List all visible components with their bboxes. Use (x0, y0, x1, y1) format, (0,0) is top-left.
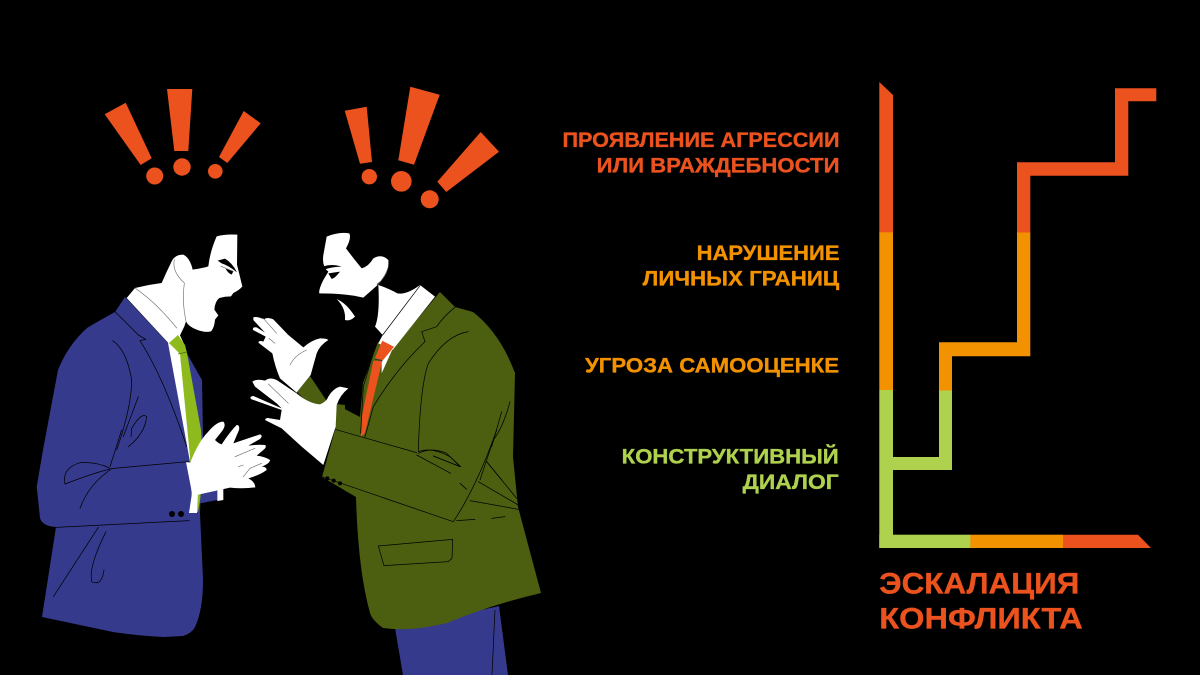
icon: exclamation marks above left man (105, 89, 261, 184)
label: threat to self-esteem: УГРОЗА САМООЦЕНКЕ (585, 354, 839, 377)
right man head and collar (319, 233, 435, 350)
label: aggression or hostility: ПРОЯВЛЕНИЕ АГРЕССИИ (562, 129, 840, 152)
label: constructive dialogue: КОНСТРУКТИВНЫЙ (622, 444, 839, 468)
left man jacket upper lines (113, 312, 187, 450)
orange step (939, 232, 1030, 390)
right man lower jacket lines (322, 430, 518, 566)
label: constructive dialogue: ДИАЛОГ (743, 471, 839, 494)
red step (1017, 88, 1156, 232)
right man lower hand (250, 378, 348, 465)
right man upper hand (253, 317, 328, 393)
icon: exclamation marks above right man (345, 87, 499, 208)
left man hands (190, 422, 270, 495)
right man trousers (395, 606, 508, 675)
left man inner jacket piece (200, 489, 223, 503)
right man shirt and tie (361, 341, 394, 437)
label: aggression or hostility: ИЛИ ВРАЖДЕБНОСТИ (597, 155, 840, 178)
right man jacket lines (335, 307, 510, 480)
chart: conflict escalation staircase (879, 82, 1156, 548)
right man tie knot (375, 341, 394, 360)
label: violation of personal boundaries (643, 242, 840, 291)
illustration: left man in blue suit (37, 235, 270, 637)
title: КОНФЛИКТА (879, 602, 1083, 636)
left man cuff (186, 462, 198, 513)
right man jacket (322, 292, 541, 629)
label: constructive dialogue (622, 444, 839, 494)
left man head and collar (127, 235, 242, 345)
green step (893, 390, 952, 470)
right man forearm (297, 376, 345, 430)
left man jacket (37, 297, 203, 637)
label: aggression or hostility (562, 129, 840, 178)
title: ЭСКАЛАЦИЯ (879, 567, 1079, 600)
label: violation of personal boundaries: НАРУШЕНИЕ (697, 242, 840, 265)
left man tie (169, 335, 202, 512)
left man shirt (168, 343, 196, 462)
vertical axis (879, 82, 893, 548)
horizontal axis (879, 535, 1151, 548)
label: violation of personal boundaries: ЛИЧНЫХ ГРАНИЦ (643, 268, 840, 291)
title (879, 567, 1083, 636)
illustration: right man in green suit (250, 233, 541, 675)
left man jacket lower lines (53, 430, 189, 597)
